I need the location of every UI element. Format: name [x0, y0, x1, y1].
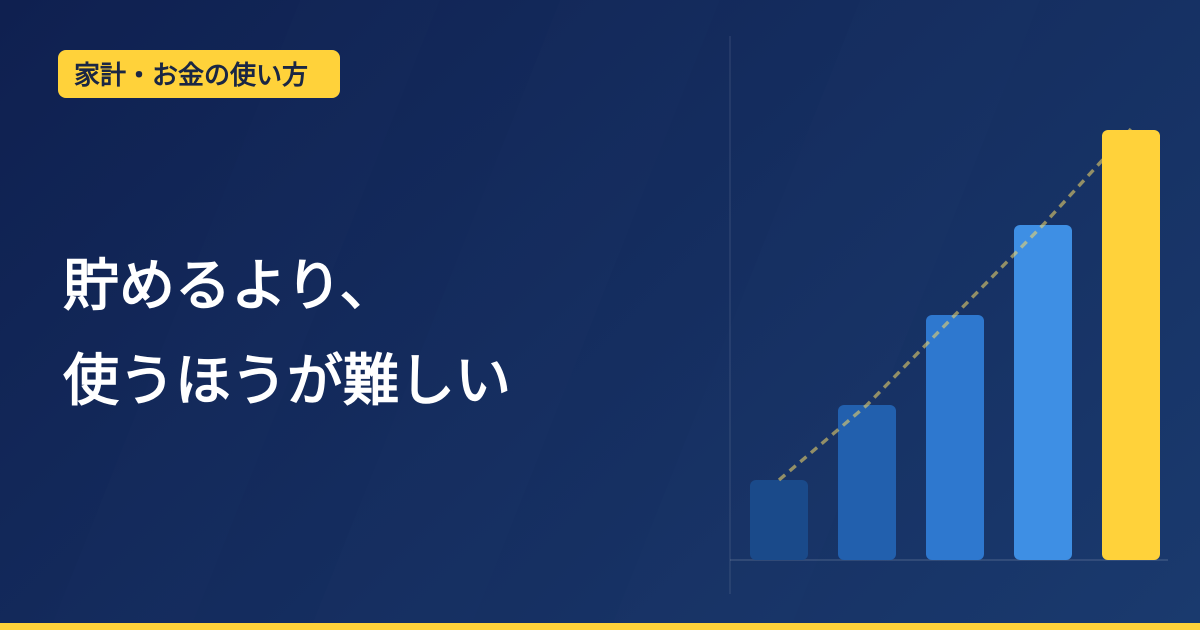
category tag	[58, 50, 340, 98]
bar 5 highlighted	[1102, 130, 1160, 560]
bottom accent bar	[0, 623, 1200, 630]
bar 4	[1014, 225, 1072, 560]
bar 2	[838, 405, 896, 560]
title	[63, 254, 511, 412]
bar 1	[750, 480, 808, 560]
title: 貯めるより、	[63, 254, 396, 317]
category tag: 家計・お金の使い方	[74, 60, 308, 90]
bar 3	[926, 315, 984, 560]
title: 使うほうが難しい	[63, 349, 511, 412]
dashed trend line	[779, 129, 1131, 480]
